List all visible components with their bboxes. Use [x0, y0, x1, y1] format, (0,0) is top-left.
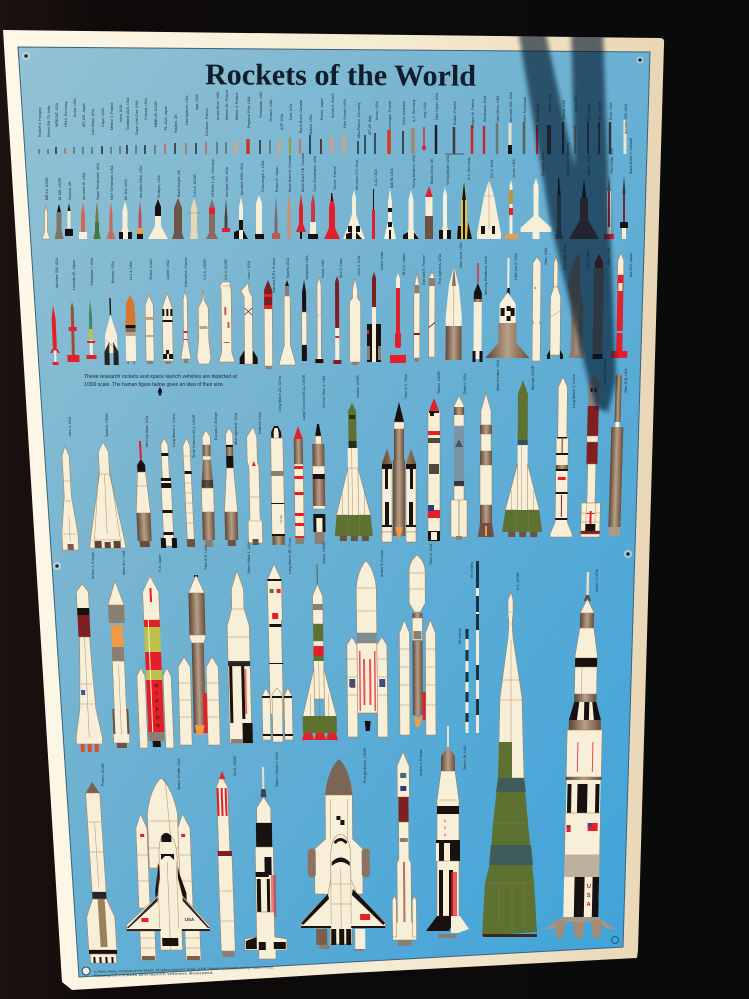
row 4 rocket labels: Vostok, USSR [356, 375, 360, 398]
rocket: Saturn V: A [586, 902, 591, 908]
row 4 rocket labels: Atlas Centaur, USA [496, 359, 500, 391]
icon: human scale figure [158, 388, 162, 396]
row 3 rocket labels: Bumper, USA [111, 261, 115, 283]
row 5 rocket labels: 60 metres [458, 628, 462, 644]
row 3 rocket labels: Diamant B, France [422, 255, 426, 285]
row 1 rocket labels: Nike Tomahawk [523, 96, 527, 122]
row 3 rocket labels: ASLV, India [380, 252, 384, 270]
rocket: Ariane 1 [69, 584, 103, 752]
row 1 rocket labels: Max-Planck, Germany [357, 102, 361, 138]
row 1 rocket labels: HM-2, Germany [64, 101, 68, 127]
row 1 rocket labels: Terrapin, USA [269, 99, 273, 122]
footer credit line: Research rockets and launch vehicles illustrated. [94, 971, 214, 978]
rocket: Ariane 4 large [226, 571, 253, 743]
rocket: H-II: I [156, 691, 158, 697]
row 3 rocket labels: Juno I, USA [247, 260, 251, 280]
row 5 rocket labels: Ariane 5, Europe [380, 550, 384, 577]
row 2 rocket labels: Saturn, USA [587, 154, 591, 175]
row 1 rocket labels: Eridan, France [453, 101, 457, 125]
row 1 rocket labels: Wasp, USA [548, 93, 552, 112]
rocket: M-3C [390, 273, 406, 363]
row 2 rocket labels [45, 138, 633, 200]
rocket: Ariane 4 [391, 752, 417, 946]
row 2 rocket labels: V-11-A, USSR [193, 174, 197, 197]
rocket: Zenit [215, 771, 235, 957]
row 2 rocket labels: Nike Tomahawk, USA [110, 165, 114, 200]
row 2 rocket labels: Aerobee Hi, USA [82, 172, 86, 200]
row 1 rocket labels: MMR-06, USSR [154, 101, 158, 127]
rocket: N-1 [482, 592, 537, 937]
rocket: Juno [57, 446, 79, 550]
rocket: Saturn IB [242, 767, 287, 959]
row 1 rocket labels: Cajun, USA [101, 108, 105, 127]
row 1 rocket labels: Sonda II, Brazil [331, 93, 335, 118]
row 4 rocket labels: Long March 2C, China [278, 376, 282, 412]
row 6 rocket labels: Space Shuttle, USA [177, 758, 181, 790]
row 2 rocket labels: Black Brant VB, Canada [301, 153, 305, 192]
rocket: Long March 1 [156, 438, 177, 548]
row 3 rocket labels: Mu-3SII, Japan [629, 253, 633, 277]
row 3 rocket labels: LLV-1, USA [129, 261, 133, 280]
row 4 rocket labels: Titan III C, USA [404, 374, 408, 399]
row 3 rocket labels: Sparta, USA [286, 257, 290, 278]
row 1 rocket labels: M-3, USSR [598, 101, 602, 120]
row 1 rocket labels: Centaure, France [205, 108, 209, 136]
row 2 rocket labels: Mf-11N, USA [124, 178, 128, 200]
row 3 rocket labels: Diamant A, France [184, 257, 188, 287]
rocket: Long March 2C: CZ-2C [279, 514, 283, 523]
row 1 rocket labels: PL-5/20, Japan [164, 106, 168, 130]
row 1 rocket labels: Dragon III, France [471, 99, 475, 128]
row 2 rocket labels: Rosse-B, Japan [275, 166, 279, 192]
rocket: Aerobee 350 [48, 305, 61, 365]
row 1 rocket labels: Zenit, Australia [402, 101, 406, 125]
row 2 rocket labels: Aerobee 150A, USA [139, 165, 143, 198]
rocket: Titan IIIC [382, 402, 416, 542]
row 4 rocket labels: Titan III B, USA [624, 368, 628, 393]
row 6 rocket labels: Saturn I Block 2, USA [275, 752, 279, 787]
row 3 rocket labels: Juno II, USA [357, 255, 361, 276]
rocket: Diamant B [264, 280, 273, 369]
scale bar: 60 and 90 metres [466, 561, 479, 733]
rocket: Jupiter [162, 293, 173, 364]
row 4 rocket labels: Sputnik, USSR [105, 413, 109, 437]
rocket: Soyuz TM [299, 564, 338, 740]
rocket: Saturn V: S [587, 893, 591, 899]
row 1 rocket labels: Tiamat, USA [562, 99, 566, 120]
rocket: H-II: P [155, 699, 160, 705]
rocket: Atlas [107, 581, 130, 748]
row 2 rocket labels: Skylark, UK [68, 181, 72, 200]
row 1 rocket labels: Super Loki-Dart, USA [135, 100, 139, 135]
row 1 rocket labels: Nike Orion, USA [496, 95, 500, 122]
rocket: Diamant B P4 [414, 273, 420, 362]
rocket: Titan IV [176, 575, 220, 745]
row 1 rocket labels: Loki Wasp, USA [91, 108, 95, 135]
row 6 rocket labels: Saturn IB, USA [463, 745, 467, 770]
row 2 rocket labels: Nike Zeus, Germany [566, 142, 570, 175]
row 1 rocket labels: Meteor 1, Poland [110, 103, 114, 130]
rocket: Long March 3 [550, 377, 574, 537]
row 1 rocket labels: A-3, Germany [412, 99, 416, 122]
row 4 rocket labels: Delta M, USA [258, 412, 262, 434]
row 3 rocket labels: Trailblazer I, USA [90, 257, 94, 286]
row 1 rocket labels: Aeg, USA [423, 102, 427, 118]
row 1 rocket labels: MT-135, Japan [82, 103, 86, 127]
row 1 rocket labels: Goddard 1926, USA [126, 97, 130, 130]
rocket: V-2-A [196, 290, 211, 364]
row 1 rocket labels: Rohini RH-75, India [47, 106, 51, 137]
row 2 rocket labels: Thor Delta, USA [610, 147, 614, 174]
rocket: Saturn I: A [444, 833, 447, 837]
row 4 rocket labels: Ariane 3, Europe [603, 358, 607, 385]
scale note text [84, 374, 238, 388]
rocket: Small Cosmos [182, 438, 195, 547]
row 2 rocket labels: A-4, Germany [467, 157, 471, 180]
row 4 rocket labels: Long March 3, China [572, 375, 576, 408]
row 1 rocket labels: Tomahawk, USA [259, 91, 263, 118]
row 6 rocket labels: Energia-Buran, USSR [363, 747, 367, 783]
row 1 rocket labels: Black Brant [536, 104, 540, 122]
row 1 rocket labels: Rohini, Japan [320, 98, 324, 120]
rocket: Thor [567, 255, 586, 358]
row 2 rocket labels: OTRAG 1 (4), Germany [211, 159, 215, 197]
row 1 rocket labels: Arcas, USA [73, 98, 77, 117]
row 6 rocket labels: Ariane 4, Europe [419, 749, 423, 776]
rocket: Juno II [350, 278, 361, 365]
row 1 rocket labels: Aerobee 150, USA [624, 103, 628, 134]
rocket: Scout [314, 277, 324, 363]
rocket: Atlas [593, 254, 604, 359]
row 2 rocket labels: Aerobee 1500, USA [240, 162, 244, 195]
row 2 rocket labels: MR-12, USSR [45, 177, 49, 200]
scale note text: These research rockets and space launch vehicles are depicted at [84, 374, 238, 380]
rocket: Saturn I: S [444, 826, 447, 830]
rocket: LLV-1 [125, 295, 136, 364]
row 1 rocket labels: Nike Apache, USA [185, 95, 189, 125]
rocket: Thor-Able [547, 257, 564, 359]
rocket: H-II: N [154, 683, 159, 689]
rocket: SLV-3 [333, 276, 341, 364]
rocket: Proton [78, 782, 118, 963]
corner logo [612, 936, 618, 944]
row 3 rocket labels: Shavit, Israel [149, 259, 153, 280]
rocket: Space Shuttle [121, 778, 211, 960]
row 4 rocket labels: Delta II, USA [463, 373, 467, 394]
row 4 rocket labels: Juno II, USA [68, 416, 72, 437]
row 2 rocket labels: DC-X, USA [490, 159, 494, 178]
row 5 rocket labels: Soyuz, USSR [322, 542, 326, 564]
row 1 rocket labels: Aerobee 300, USA [509, 91, 513, 122]
row 4 rocket labels: Small Cosmos 65-1, USSR [192, 414, 196, 458]
row 4 rocket labels [68, 358, 628, 458]
row 4 rocket labels: Tsiklon, USSR [437, 371, 441, 394]
row 4 rocket labels: Europa 1, Europe [214, 412, 218, 440]
row 3 rocket labels: V-2-A, USSR [203, 259, 207, 280]
rocket: Saturn V [544, 572, 623, 938]
row 3 rocket labels: Thor II, USA [586, 250, 590, 270]
rocket: Mercury Redstone [472, 263, 483, 362]
rocket: Europa [200, 430, 215, 547]
row 1 rocket labels: Nike Smoke, USA [343, 99, 347, 128]
rocket: Delta M [246, 427, 263, 545]
row 3 rocket labels: Titan, USA [544, 247, 548, 265]
rocket: Mercury Atlas [133, 441, 152, 547]
rocket: Atlas Agena [222, 428, 238, 546]
row 6 rocket labels [101, 745, 467, 790]
mounting holes [22, 52, 644, 570]
row 1 rocket labels: Dart, USA [289, 103, 293, 120]
row 5 rocket labels: Titan IV, USA [429, 543, 433, 565]
rocket: Vanguard [302, 280, 307, 361]
rocket: Trailblazer [85, 299, 97, 359]
row 6 rocket labels: Zenit, USSR [233, 756, 237, 776]
rocket: Saturn I [426, 726, 469, 938]
rocket: Gemini Titan [312, 424, 326, 544]
rocket: H-II: O [156, 715, 160, 721]
row 3 rocket labels: Diamant B-P4, France [272, 257, 276, 293]
row 1 rocket labels: WRESAT, USA [55, 102, 59, 127]
row 3 rocket labels: Jupiter, USA [166, 259, 170, 280]
row 4 rocket labels: Gemini Titan 1, USA [322, 375, 326, 408]
rocket: Thor Agena A [429, 272, 435, 357]
row 1 rocket labels: Nike Cajun, USA [435, 92, 439, 120]
rocket: Atlas Centaur [478, 393, 494, 537]
poster blue panel [18, 47, 650, 977]
row 5 rockets: heavy launchers [69, 555, 623, 938]
row 1 rocket labels: Meteor 2K, Poland [225, 90, 229, 120]
rocket: Mu-SC [611, 253, 629, 358]
row 2 rocket labels: Jarvis, USA [512, 159, 516, 178]
row 2 rocket labels: Pegasus, USA [541, 152, 545, 176]
row 3 rockets: large research rockets [48, 253, 629, 369]
rocket: ASLV [367, 272, 381, 362]
footer credit line [82, 965, 274, 978]
row 3 rocket labels: SLV-3, India [339, 259, 343, 278]
row 5 rocket labels [91, 538, 599, 644]
row 1 rocket labels: Iskra, USA [119, 104, 123, 122]
row 2 rocket labels: Viking Model 8, USA [412, 155, 416, 188]
rocket: Sparta [279, 280, 295, 365]
rocket: V-8-2 [218, 282, 235, 362]
row 2 rocket labels: Black Knight, UK [177, 169, 181, 197]
row 6 rockets: largest vehicles [78, 726, 469, 963]
rocket: Buran Energia [300, 759, 385, 951]
rocket: Titan 3B [608, 372, 625, 536]
rocket: Ariane [581, 376, 604, 537]
row 3 rocket labels: Thor Agena A, USA [438, 253, 442, 285]
row 6 rocket labels: Proton, USSR [101, 763, 105, 786]
row 3 rocket labels: Lambda 4S, Japan [72, 260, 76, 290]
row 2 rocket labels: Super Tomahawk, USA [96, 162, 100, 200]
row 2 rocket labels: M-100, USSR [58, 177, 62, 200]
rocket: Long March 2E [259, 564, 293, 742]
row 3 rocket labels: Nike Zeus, USA [459, 242, 463, 268]
rocket: Ariane 5 [345, 561, 389, 737]
row 3 rocket labels: V-8-V, USSR [224, 259, 228, 280]
row 2 rocket labels: Aerobee 300, USA [225, 166, 229, 197]
rocket: Soyuz [502, 380, 543, 537]
rocket: Nike Zeus [446, 266, 462, 360]
row 2 rocket labels: A-11, USA [374, 169, 378, 186]
rocket: Long Cosmos [294, 426, 304, 544]
row 3 rocket labels: Atlas, USA [607, 247, 611, 265]
rocket: Bumper [103, 298, 119, 365]
row 1 rocket labels: Arcas-Orion, USA [216, 91, 220, 120]
rocket: Titan IV B [399, 555, 436, 735]
row 4 rocket labels: Long March 1, China [172, 414, 176, 447]
row 4 rocket labels: Atlas Agena B, USA [234, 412, 238, 445]
row 2 rockets: medium research rockets [42, 176, 628, 239]
rocket: Saturn V: U [587, 884, 591, 890]
row 1 rocket labels [38, 90, 628, 138]
hanging strap shadow across poster [518, 30, 616, 412]
row 5 rocket labels: Titan III E, USA [204, 545, 208, 570]
row 2 rocket labels: Black Brant V, Canada [629, 138, 633, 174]
row 5 rocket labels: H-II, Japan [158, 554, 162, 572]
row 3 rocket labels: Aerobee 350, USA [55, 257, 59, 288]
row 1 rocket labels: Argo, USA [574, 94, 578, 112]
title: Rockets of the World [205, 58, 476, 93]
row 3 rocket labels: Thor-Able, USA [563, 244, 567, 270]
footer credit line: © Peter Alway, Rockets of the World. All rights reserved. Scale 1/300. Printed and distributed by Saturn Press. [94, 965, 274, 974]
row 1 rocket labels: Cheops, USA [144, 98, 148, 120]
row 3 rocket labels [55, 242, 633, 295]
rocket: Diamant [180, 291, 191, 363]
rocket: Space Shuttle: USA [185, 917, 195, 922]
row 3 rocket labels: Vanguard, USA [305, 255, 309, 280]
row 2 rocket labels: Tiros Ghosthawk, USA [313, 155, 317, 192]
row 1 rocket labels: Pegasus Pilot, USA [247, 96, 251, 128]
row 1 rocket labels: Stabilo, USA [309, 114, 313, 135]
row 1 rockets: smallest research rockets [39, 120, 625, 154]
rocket: Titan [532, 257, 541, 361]
row 4 rockets: launch vehicles [57, 372, 625, 550]
row 1 rocket labels: Arcon, USA [375, 101, 379, 120]
row 5 rocket labels: Long March 2E, China [288, 538, 292, 574]
rocket: Saturn I: U [444, 819, 447, 823]
rocket: Shavit [145, 295, 154, 364]
row 3 rocket labels: Mercury Redstone, USA [484, 256, 488, 295]
row 2 rocket labels: Cosmologie 1, USA [261, 160, 265, 192]
row 1 rocket labels: Veronique, France [388, 101, 392, 130]
row 1 rocket labels: Meteor 3, Poland [235, 93, 239, 120]
row 5 rocket labels: Atlas SLV, USA [122, 550, 126, 575]
rocket: Little Joe II [485, 258, 530, 358]
row 5 rocket labels: Ariane 1, Europe [91, 552, 95, 579]
row 5 rocket labels: 90 metres [470, 562, 474, 578]
row 1 rocket labels: Rocket II, Hungary [38, 107, 42, 137]
rocket: Delta II [451, 396, 467, 540]
row 3 rocket labels: Scout, USA [321, 259, 325, 278]
rocket: H-II: P [156, 707, 160, 713]
row 1 rocket labels: ASP, USA [280, 113, 284, 130]
row 4 rocket labels: Large Cosmos 65-11, USSR [302, 374, 306, 420]
row 2 rocket labels: Aerobee 170, USA [355, 159, 359, 190]
row 2 rocket labels: Black Brant III, Canada [288, 155, 292, 192]
row 2 rocket labels: Black Arrow, UK [430, 158, 434, 184]
row 5 rocket labels: N-1, USSR [516, 572, 520, 590]
row 3 rocket labels: M-3-S, Japan [402, 253, 406, 275]
row 1 rocket labels: Sandhawk, USA [483, 95, 487, 122]
row 1 rocket labels: Aqa, USA [195, 94, 199, 110]
row 4 rocket labels: Molniya, USSR [531, 365, 535, 390]
row 1 rocket labels: Skylark, UK [174, 114, 178, 133]
scale note text: 1/300 scale. The human figure below gives an idea of their size. [84, 382, 224, 388]
row 2 rocket labels: Tonnie, France [333, 166, 337, 190]
rocket: Sputnik [85, 442, 126, 548]
rocket: Juno I [239, 283, 258, 364]
row 5 rocket labels: Saturn Mark 1, USA [247, 541, 251, 574]
row 5 rocket labels: Saturn V, USA [595, 568, 599, 592]
rocket: Lambda 4S [66, 302, 80, 362]
row 2 rocket labels: Ball IB, USA [390, 168, 394, 188]
rocket: Long March 2C [270, 426, 285, 545]
rocket: H-II: N [156, 723, 160, 729]
row 3 rocket labels: Little Joe II, USA [514, 253, 518, 280]
rocket: Vostok [333, 403, 373, 541]
row 1 rocket labels: AFI-25, Italy [368, 115, 372, 135]
rocket: H-II [133, 576, 174, 748]
row 4 rocket labels: Mercury Atlas, USA [145, 415, 149, 447]
row 2 rocket labels: Shotgun, USA [157, 175, 161, 198]
row 1 rocket labels: Nike Hydac [587, 103, 591, 122]
row 1 rocket labels: Rock, USA [609, 102, 613, 120]
row 2 rocket labels: Viking Model, USA [446, 155, 450, 185]
rocket: Titan II [428, 398, 440, 541]
row 1 rocket labels: Black Brant, Canada [299, 100, 303, 133]
